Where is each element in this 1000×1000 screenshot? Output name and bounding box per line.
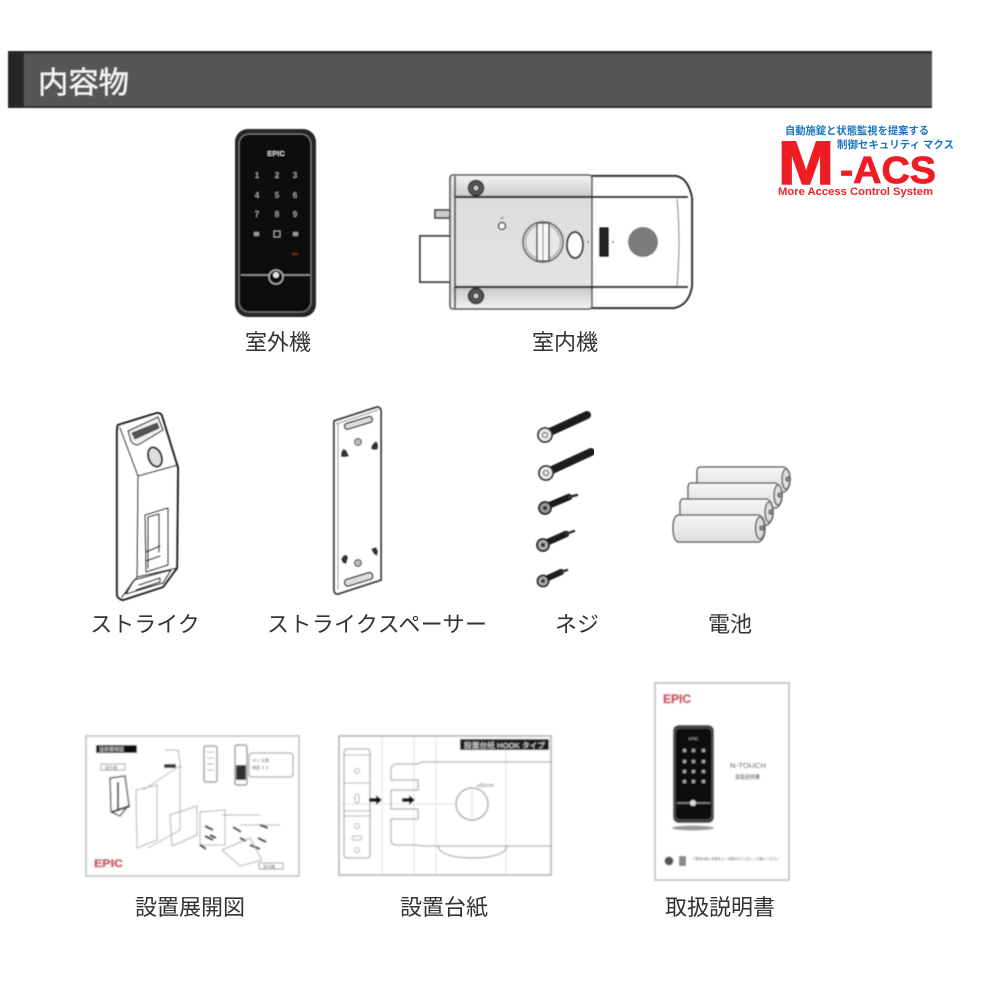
outdoor unit: 6 xyxy=(293,191,298,200)
installation exploded diagram: 設置展開図 xyxy=(99,746,124,753)
outdoor unit: 1 xyxy=(255,171,260,180)
labels: row 1 xyxy=(245,330,598,355)
outdoor unit: EPIC xyxy=(267,149,285,158)
logo: M-ACS: 制御セキュリティ マクス xyxy=(837,138,954,151)
batteries xyxy=(673,467,790,542)
labels: row 2: ストライク xyxy=(90,612,200,637)
logo: M-ACS: M xyxy=(778,129,834,197)
labels: row 2 xyxy=(90,612,752,637)
installation exploded diagram: 室内機 xyxy=(263,863,275,869)
user manual: N-TOUCH xyxy=(730,763,766,770)
screws xyxy=(537,415,591,586)
labels: row 3 xyxy=(135,895,775,920)
indoor unit xyxy=(420,175,692,309)
outdoor unit: 7 xyxy=(255,210,260,219)
installation exploded diagram: 確認 する xyxy=(252,764,269,770)
outdoor unit: 9 xyxy=(293,210,298,219)
user manual: 取扱説明書 xyxy=(735,773,760,781)
user manual xyxy=(655,683,789,880)
logo: M-ACS: -ACS xyxy=(840,150,936,192)
title bar xyxy=(8,51,932,108)
installation template xyxy=(339,736,551,875)
labels: row 3: 設置展開図 xyxy=(135,895,245,920)
installation exploded diagram: ネジ 位置 xyxy=(252,757,269,763)
user manual: ご使用の前に本書をよくお読みのうえ正しくお使いください xyxy=(692,856,779,861)
outdoor unit xyxy=(235,129,316,317)
outdoor unit: 3 xyxy=(293,171,298,180)
labels: row 2: ネジ xyxy=(555,612,599,637)
strike spacer xyxy=(334,407,381,594)
labels: row 3: 設置台紙 xyxy=(400,895,488,920)
outdoor unit: 8 xyxy=(275,210,280,219)
installation exploded diagram xyxy=(86,736,299,876)
user manual: EPIC xyxy=(689,736,698,741)
labels: row 3: 取扱説明書 xyxy=(665,895,775,920)
outdoor unit: 4 xyxy=(255,191,260,200)
logo: M-ACS xyxy=(778,124,954,198)
user manual: EPIC xyxy=(663,692,691,706)
logo: M-ACS: 自動施錠と状態監視を提案する xyxy=(785,124,929,137)
labels: row 1: 室外機 xyxy=(245,330,311,355)
installation exploded diagram: 室外機 xyxy=(105,764,117,770)
installation exploded diagram: EPIC xyxy=(94,858,123,870)
labels: row 1: 室内機 xyxy=(532,330,598,355)
installation template: 設置台紙 HOOK タイプ xyxy=(464,740,546,750)
installation template: ⌀50mm xyxy=(477,783,494,789)
strike xyxy=(117,413,178,600)
labels: row 2: ストライクスペーサー xyxy=(267,612,487,637)
title bar: 内容物 xyxy=(38,67,129,100)
outdoor unit: 2 xyxy=(275,171,280,180)
labels: row 2: 電池 xyxy=(708,612,752,637)
outdoor unit: 5 xyxy=(275,191,280,200)
logo: M-ACS: More Access Control System xyxy=(778,186,933,198)
